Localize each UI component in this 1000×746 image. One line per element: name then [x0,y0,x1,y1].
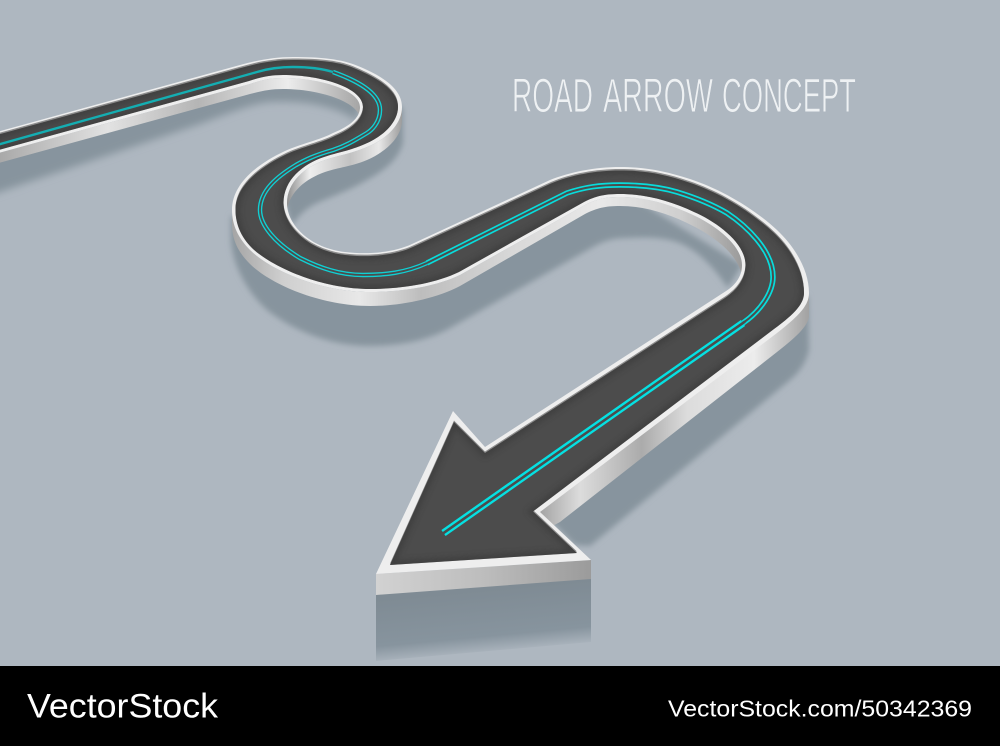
shadow: upper bend [284,105,403,226]
shadow: arrow head [376,579,591,660]
wall: left strip [0,78,360,164]
wall: arrow shaft [530,293,809,530]
wall: arrow head front [376,560,591,595]
line: upper S [260,72,427,275]
centre lines [0,67,773,535]
shadow: S curve and long straight [231,190,742,346]
asphalt edge shading [0,60,804,565]
shadow: arrow shaft [545,295,809,546]
wall: upper bend [287,107,402,210]
title: ARROW [603,70,713,123]
road shadows [0,75,809,661]
title [512,70,856,123]
shadow: left strip [0,75,360,197]
wall: S curve and long straight [232,197,742,306]
footer url: VectorStock.com/50342369 [668,696,972,722]
road surface [0,57,809,574]
title: CONCEPT [722,70,856,123]
footer bar [0,666,1000,746]
line: left strip [0,67,333,146]
white rim [0,57,809,574]
footer logo: VectorStock [27,688,219,726]
line: arrow shaft [441,322,745,535]
line: long straight and bend [427,185,773,323]
asphalt [0,60,804,565]
road side walls [0,78,809,595]
title: ROAD [512,70,593,123]
inner kerb shade [0,58,804,564]
